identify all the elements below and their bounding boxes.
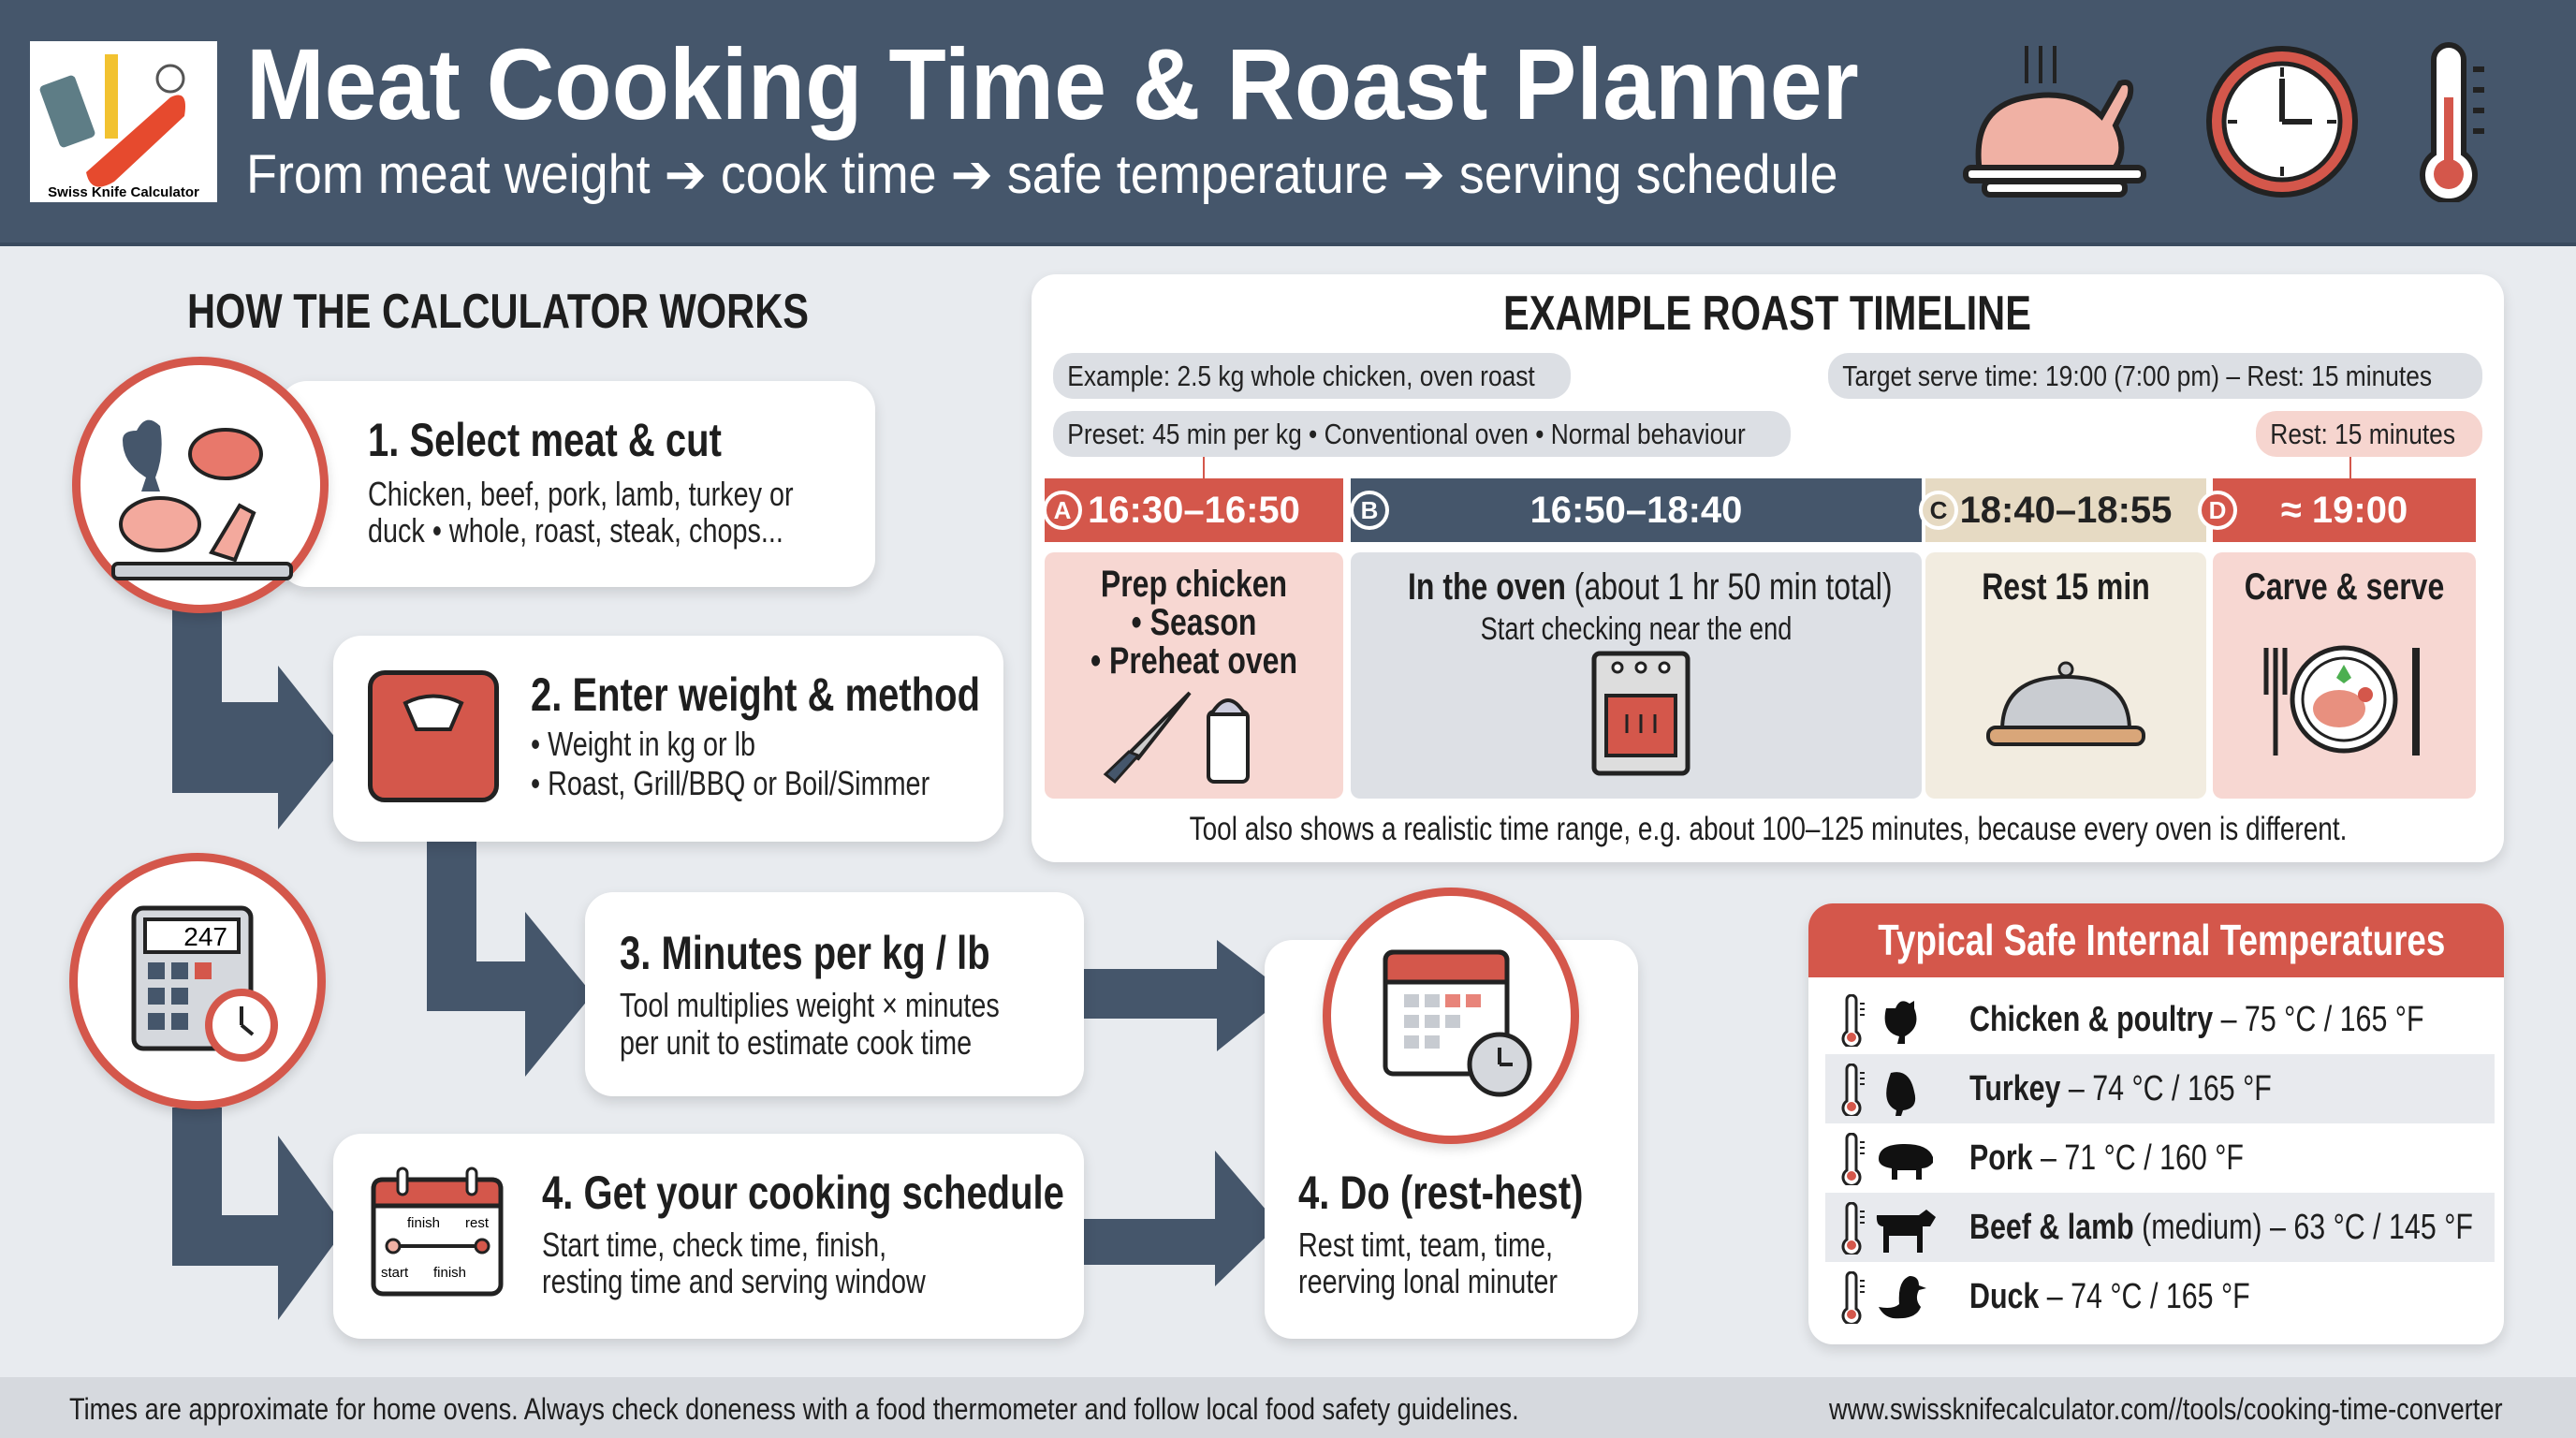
step3 text	[620, 986, 1000, 1062]
box: carve	[2213, 552, 2476, 799]
panel: step 4b rest	[1265, 940, 1638, 1339]
segment B	[1351, 478, 1922, 542]
panel: safe internal temperatures	[1808, 903, 2504, 1344]
panel: step 4 schedule	[333, 1134, 1084, 1339]
icon: calculator circle	[69, 853, 326, 1109]
step4 text: resting time and serving window	[542, 1262, 926, 1300]
pill: preset: Preset: 45 min per kg • Conventional oven • Normal behaviour	[1067, 418, 1746, 450]
timeline bar: A	[1054, 496, 1071, 524]
step2 bullets	[531, 725, 929, 802]
step4b text	[1298, 1225, 1558, 1300]
icon: knife and salt	[1103, 691, 1250, 784]
footer	[0, 1377, 2576, 1438]
step4b text: Rest timt, team, time,	[1298, 1225, 1553, 1264]
icon: schedule calendar	[371, 1167, 504, 1296]
icon: schedule calendar: start	[381, 1265, 409, 1281]
icon: thermometer	[2420, 42, 2484, 202]
step4b text: reerving lonal minuter	[1298, 1262, 1558, 1300]
panel: step 3	[585, 892, 1084, 1096]
step1 text	[368, 475, 794, 550]
segment C: 18:40–18:55	[1960, 490, 2172, 531]
step4 text	[542, 1225, 926, 1300]
segment D: ≈ 19:00	[2281, 490, 2408, 531]
step2 heading: 2. Enter weight & method	[531, 668, 980, 721]
subtitle: From meat weight ➔ cook time ➔ safe temperature ➔ serving schedule	[246, 144, 1838, 205]
temp row: duck	[1842, 1271, 2250, 1324]
arrow: calculator down to step4	[172, 1108, 345, 1320]
arrow: step2 to step3	[427, 838, 593, 1077]
icon: oven	[1591, 652, 1690, 775]
box: oven: In the oven (about 1 hr 50 min total)	[1408, 566, 1893, 608]
segment A	[1045, 478, 1343, 542]
arrow: step3 to step4b	[1081, 940, 1288, 1051]
box: oven: Start checking near the end	[1481, 611, 1792, 647]
box: carve: Carve & serve	[2245, 566, 2444, 608]
icon: cloche	[1986, 661, 2145, 746]
arrow: step4 to step4b	[1081, 1151, 1279, 1286]
logo	[30, 41, 217, 202]
box: rest	[1925, 552, 2206, 799]
icon: plate	[2263, 646, 2420, 756]
icon: scale	[368, 670, 499, 802]
icon: clock	[2206, 46, 2358, 198]
temp row: chicken	[1842, 994, 2424, 1047]
pill: rest: Rest: 15 minutes	[2270, 418, 2455, 450]
timeline heading: EXAMPLE ROAST TIMELINE	[1503, 286, 2031, 341]
temps header	[1808, 903, 2504, 977]
heading: how the calculator works: HOW THE CALCULATOR WORKS	[187, 285, 809, 339]
segment B: 16:50–18:40	[1530, 490, 1742, 531]
temp row: pork: Pork – 71 °C / 160 °F	[1969, 1138, 2244, 1178]
box: prep: Prep chicken	[1101, 564, 1287, 605]
temp row: chicken: Chicken & poultry – 75 °C / 165 °F	[1969, 1000, 2424, 1039]
step4 heading: 4. Get your cooking schedule	[542, 1167, 1064, 1219]
pill: rest	[2256, 411, 2482, 457]
box: prep: • Preheat oven	[1090, 640, 1297, 682]
box: oven	[1351, 552, 1922, 799]
temps header: Typical Safe Internal Temperatures	[1878, 916, 2445, 964]
step2 bullets: • Roast, Grill/BBQ or Boil/Simmer	[531, 764, 929, 802]
segment D	[2213, 478, 2476, 542]
segment A: 16:30–16:50	[1088, 490, 1300, 531]
icon: schedule calendar: rest	[465, 1215, 490, 1231]
icon: calendar clock circle	[1323, 888, 1579, 1144]
temp row: beef and lamb: Beef & lamb (medium) – 63 °C / 145 °F	[1969, 1208, 2473, 1247]
icon: schedule calendar: finish	[407, 1215, 440, 1231]
timeline bar	[1045, 478, 2476, 542]
timeline footnote: Tool also shows a realistic time range, e.g. about 100–125 minutes, because every oven is different.	[1190, 811, 2347, 847]
pill: target: Target serve time: 19:00 (7:00 pm) – Rest: 15 minutes	[1842, 360, 2432, 392]
temp row: pork	[1842, 1133, 2244, 1185]
step4 text: Start time, check time, finish,	[542, 1225, 886, 1264]
icon: calculator circle: 247	[183, 922, 227, 951]
temp row: turkey	[1825, 1054, 2495, 1123]
panel: step 2	[333, 636, 1003, 842]
pill: target	[1828, 353, 2482, 399]
icon: meat selection circle	[72, 357, 329, 613]
logo: Swiss Knife Calculator	[48, 184, 199, 200]
pill: example	[1053, 353, 1571, 399]
timeline bar: D	[2209, 496, 2226, 524]
temp row: duck: Duck – 74 °C / 165 °F	[1969, 1277, 2250, 1316]
timeline bar: B	[1361, 496, 1378, 524]
pill: preset	[1053, 411, 1791, 457]
title: Meat Cooking Time & Roast Planner	[246, 27, 1859, 140]
arrow: step1 to step2	[172, 609, 344, 829]
pill: example: Example: 2.5 kg whole chicken, oven roast	[1067, 360, 1535, 392]
box: prep	[1045, 552, 1343, 799]
footer url: www.swissknifecalculator.com//tools/cooking-time-converter	[1829, 1392, 2503, 1426]
temp row: beef and lamb	[1825, 1193, 2495, 1262]
timeline bar: C	[1930, 496, 1947, 524]
step2 bullets: • Weight in kg or lb	[531, 725, 755, 763]
step1 text: duck • whole, roast, steak, chops...	[368, 511, 783, 550]
step3 heading: 3. Minutes per kg / lb	[620, 927, 990, 979]
box: rest: Rest 15 min	[1982, 566, 2150, 608]
segment C	[1925, 478, 2206, 542]
panel: example roast timeline	[1032, 274, 2504, 862]
box: prep: • Season	[1132, 602, 1256, 643]
temp row: turkey: Turkey – 74 °C / 165 °F	[1969, 1069, 2272, 1108]
step3 text: per unit to estimate cook time	[620, 1023, 972, 1062]
step1 text: Chicken, beef, pork, lamb, turkey or	[368, 475, 794, 513]
icon: roast chicken	[1963, 46, 2146, 198]
header band	[0, 0, 2576, 246]
footer disclaimer: Times are approximate for home ovens. Always check doneness with a food thermometer and follow local food safety guidelines.	[69, 1392, 1519, 1426]
step3 text: Tool multiplies weight × minutes	[620, 986, 1000, 1024]
panel: step 1	[279, 381, 875, 587]
icon: schedule calendar: finish	[433, 1265, 466, 1281]
step4b heading: 4. Do (rest-hest)	[1298, 1167, 1584, 1219]
step1 heading: 1. Select meat & cut	[368, 414, 722, 466]
